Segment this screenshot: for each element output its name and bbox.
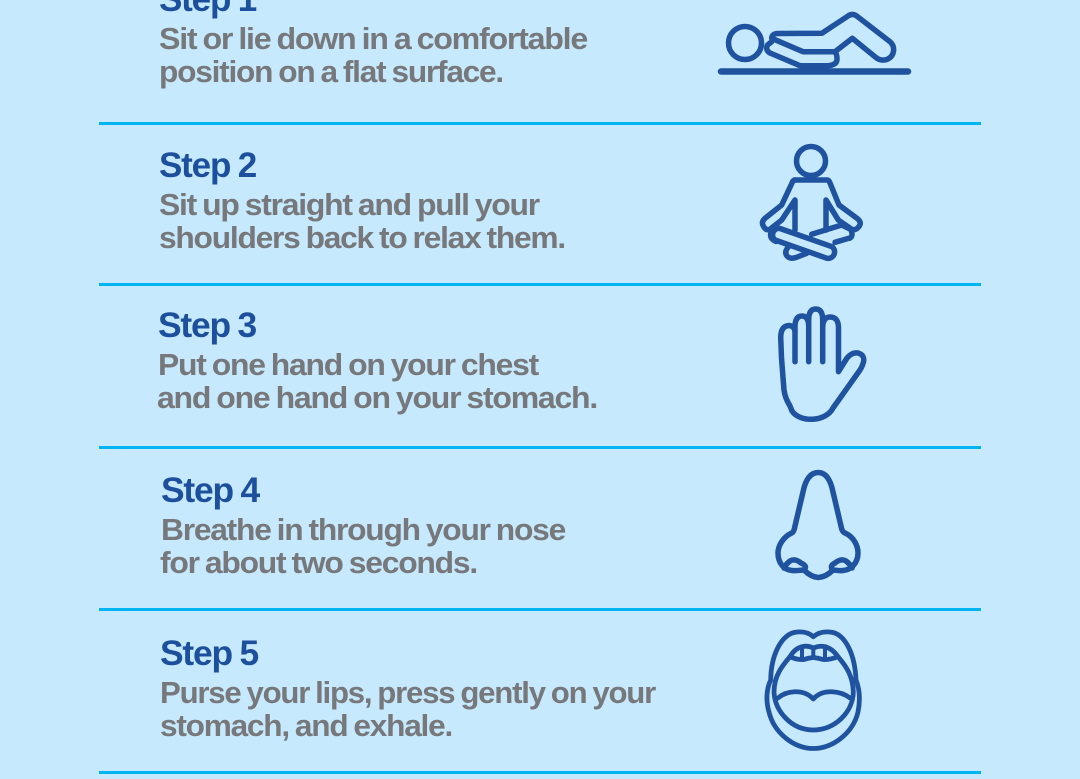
step 5 text: stomach, and exhale. — [160, 708, 452, 743]
step 4 text: Breathe in through your nose — [161, 512, 566, 547]
icon: person lying down — [721, 14, 908, 72]
step 5 text: Purse your lips, press gently on your — [160, 675, 656, 710]
step 2 text — [159, 146, 565, 255]
step 3 text — [157, 306, 597, 415]
icon: open mouth — [767, 632, 859, 748]
step 5 text — [160, 634, 656, 743]
step 2 text: shoulders back to relax them. — [159, 220, 565, 255]
step 3 text: and one hand on your stomach. — [157, 380, 597, 415]
step 3 text: Put one hand on your chest — [158, 347, 539, 382]
icon: raised hand — [781, 309, 864, 419]
step 1 text — [159, 0, 588, 89]
icon: nose — [778, 472, 858, 578]
step 2 text: Sit up straight and pull your — [159, 187, 540, 222]
step 4 text: for about two seconds. — [160, 545, 477, 580]
step 5 text: Step 5 — [160, 634, 259, 673]
step 1 text: Sit or lie down in a comfortable — [159, 21, 588, 56]
step 2 text: Step 2 — [159, 146, 257, 185]
step 4 text — [160, 471, 566, 580]
step 1 text: position on a flat surface. — [159, 54, 503, 89]
icon: seated meditation pose — [762, 146, 860, 258]
step 3 text: Step 3 — [158, 306, 257, 345]
step 4 text: Step 4 — [161, 471, 261, 510]
